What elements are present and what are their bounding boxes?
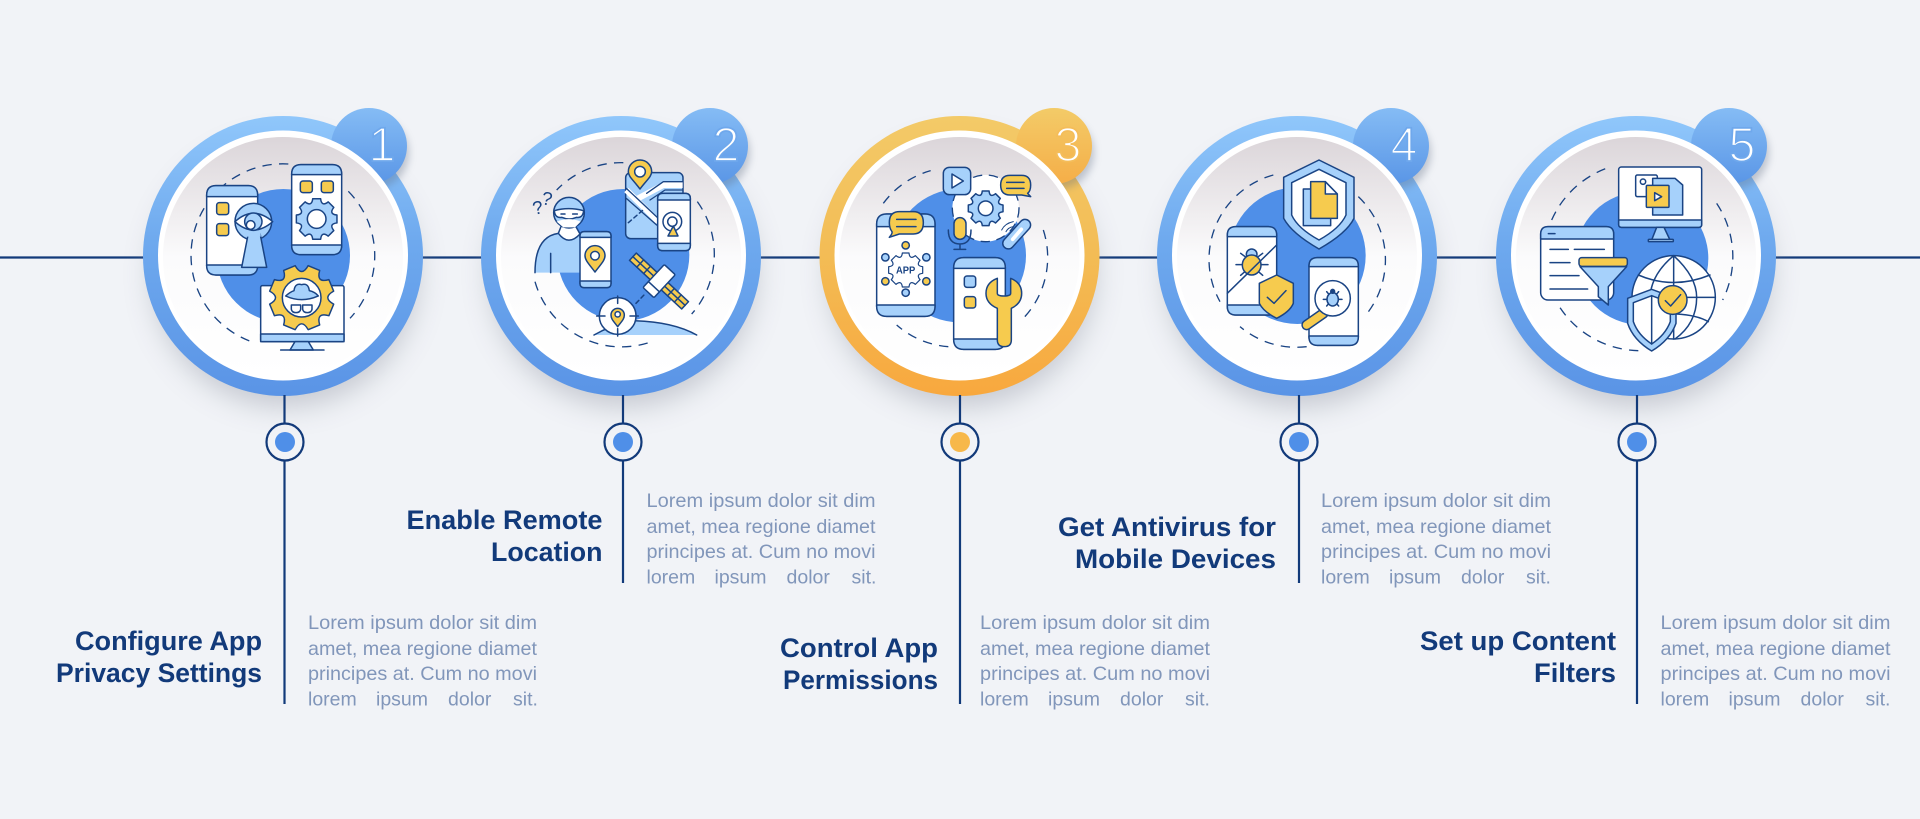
- body text 2: Lorem ipsum dolor sit dim: [646, 490, 876, 512]
- body text 2: amet, mea regione diamet: [646, 516, 876, 538]
- number badge 4: [1353, 108, 1431, 189]
- heading 3: [780, 633, 938, 695]
- icon: app permissions phones, media, microphone and wrench: [877, 167, 1048, 349]
- icon: phones, keyhole eye and incognito settings: [191, 164, 375, 350]
- number badge 2: [672, 108, 750, 189]
- heading 1: [56, 626, 262, 688]
- ring 5: [1496, 116, 1776, 407]
- body text 1: amet, mea regione diamet: [308, 638, 538, 660]
- body text 1: sit.: [513, 688, 538, 710]
- heading 5: [1420, 626, 1616, 688]
- body text 5: principes at. Cum no movi: [1660, 663, 1890, 685]
- panel: step 3 control app permissions: [780, 108, 1211, 710]
- body text 5: lorem: [1660, 688, 1709, 710]
- panel: step 1 configure app privacy settings: [56, 108, 538, 710]
- body text 2: sit.: [852, 566, 876, 588]
- icon: masked person, map, satellite and location target: ?: [540, 187, 554, 210]
- body text 4: amet, mea regione diamet: [1321, 516, 1552, 538]
- ring 1: [143, 116, 423, 407]
- body text 1: ipsum: [376, 688, 428, 710]
- body text 3: sit.: [1185, 688, 1210, 710]
- body text 5: sit.: [1866, 688, 1890, 710]
- body text 3: ipsum: [1048, 688, 1100, 710]
- body text 3: principes at. Cum no movi: [980, 663, 1210, 685]
- heading 5: Filters: [1534, 658, 1616, 688]
- heading 1: Configure App: [75, 626, 262, 656]
- body text 3: dolor: [1120, 688, 1164, 710]
- number badge 4: 4: [1391, 119, 1417, 172]
- body text 3: [980, 612, 1211, 710]
- body text 5: [1660, 612, 1891, 710]
- body text 4: ipsum: [1389, 566, 1441, 588]
- body text 1: principes at. Cum no movi: [308, 663, 537, 685]
- body text 2: dolor: [786, 566, 830, 588]
- number badge 1: 1: [369, 119, 395, 172]
- heading 2: Location: [491, 537, 602, 567]
- heading 2: Enable Remote: [406, 505, 602, 535]
- number badge 5: 5: [1729, 119, 1755, 172]
- body text 4: [1321, 490, 1552, 588]
- body text 4: sit.: [1526, 566, 1551, 588]
- heading 5: Set up Content: [1420, 626, 1616, 656]
- body text 5: Lorem ipsum dolor sit dim: [1660, 612, 1890, 634]
- heading 4: Get Antivirus for: [1058, 512, 1276, 542]
- heading 3: Permissions: [783, 665, 938, 695]
- body text 2: principes at. Cum no movi: [646, 541, 876, 563]
- heading 2: [406, 505, 602, 567]
- body text 4: dolor: [1461, 566, 1505, 588]
- body text 3: Lorem ipsum dolor sit dim: [980, 612, 1210, 634]
- body text 4: principes at. Cum no movi: [1321, 541, 1551, 563]
- icon: shield with documents and phones with bugs: [1209, 160, 1385, 347]
- timeline line: [0, 256, 1920, 259]
- inner face 2: [496, 130, 746, 380]
- inner face 4: [1172, 130, 1422, 380]
- icon: masked person, map, satellite and location target: [530, 160, 714, 347]
- body text 2: [646, 490, 876, 588]
- ring 2: [481, 116, 761, 407]
- body text 4: Lorem ipsum dolor sit dim: [1321, 490, 1551, 512]
- inner face 1: [158, 130, 408, 380]
- body text 5: ipsum: [1728, 688, 1781, 710]
- heading 3: Control App: [780, 633, 938, 663]
- heading 4: Mobile Devices: [1075, 544, 1276, 574]
- body text 5: dolor: [1800, 688, 1844, 710]
- body text 2: lorem: [646, 566, 695, 588]
- connector node 1: [266, 395, 304, 704]
- heading 4: [1058, 512, 1276, 574]
- inner face 3: [834, 130, 1084, 380]
- inner face 5: [1511, 130, 1761, 380]
- panel: step 4 get antivirus for mobile devices: [1058, 108, 1552, 588]
- body text 1: dolor: [448, 688, 492, 710]
- icon: masked person, map, satellite and location target: ?: [530, 196, 545, 219]
- panel: step 5 set up content filters: [1420, 108, 1891, 710]
- ring 4: [1157, 116, 1437, 407]
- connector node 4: [1280, 395, 1318, 583]
- ring 3: [820, 116, 1100, 407]
- icon: monitor with media, browser filter and protected globe: [1541, 167, 1733, 351]
- body text 2: ipsum: [714, 566, 767, 588]
- number badge 5: [1691, 108, 1769, 189]
- connector node 3: [942, 395, 978, 704]
- body text 1: [308, 612, 538, 710]
- connector node 2: [604, 395, 642, 583]
- icon: app permissions phones, media, microphone and wrench: APP: [896, 266, 916, 277]
- number badge 2: 2: [713, 119, 739, 172]
- body text 1: lorem: [308, 688, 357, 710]
- number badge 1: [331, 108, 409, 189]
- body text 3: lorem: [980, 688, 1029, 710]
- number badge 3: 3: [1055, 119, 1081, 172]
- body text 4: lorem: [1321, 566, 1370, 588]
- number badge 3: [1016, 108, 1094, 189]
- body text 5: amet, mea regione diamet: [1660, 638, 1891, 660]
- panel: step 2 enable remote location: [406, 108, 876, 588]
- heading 1: Privacy Settings: [56, 658, 262, 688]
- body text 3: amet, mea regione diamet: [980, 638, 1211, 660]
- connector node 5: [1618, 395, 1656, 704]
- body text 1: Lorem ipsum dolor sit dim: [308, 612, 537, 634]
